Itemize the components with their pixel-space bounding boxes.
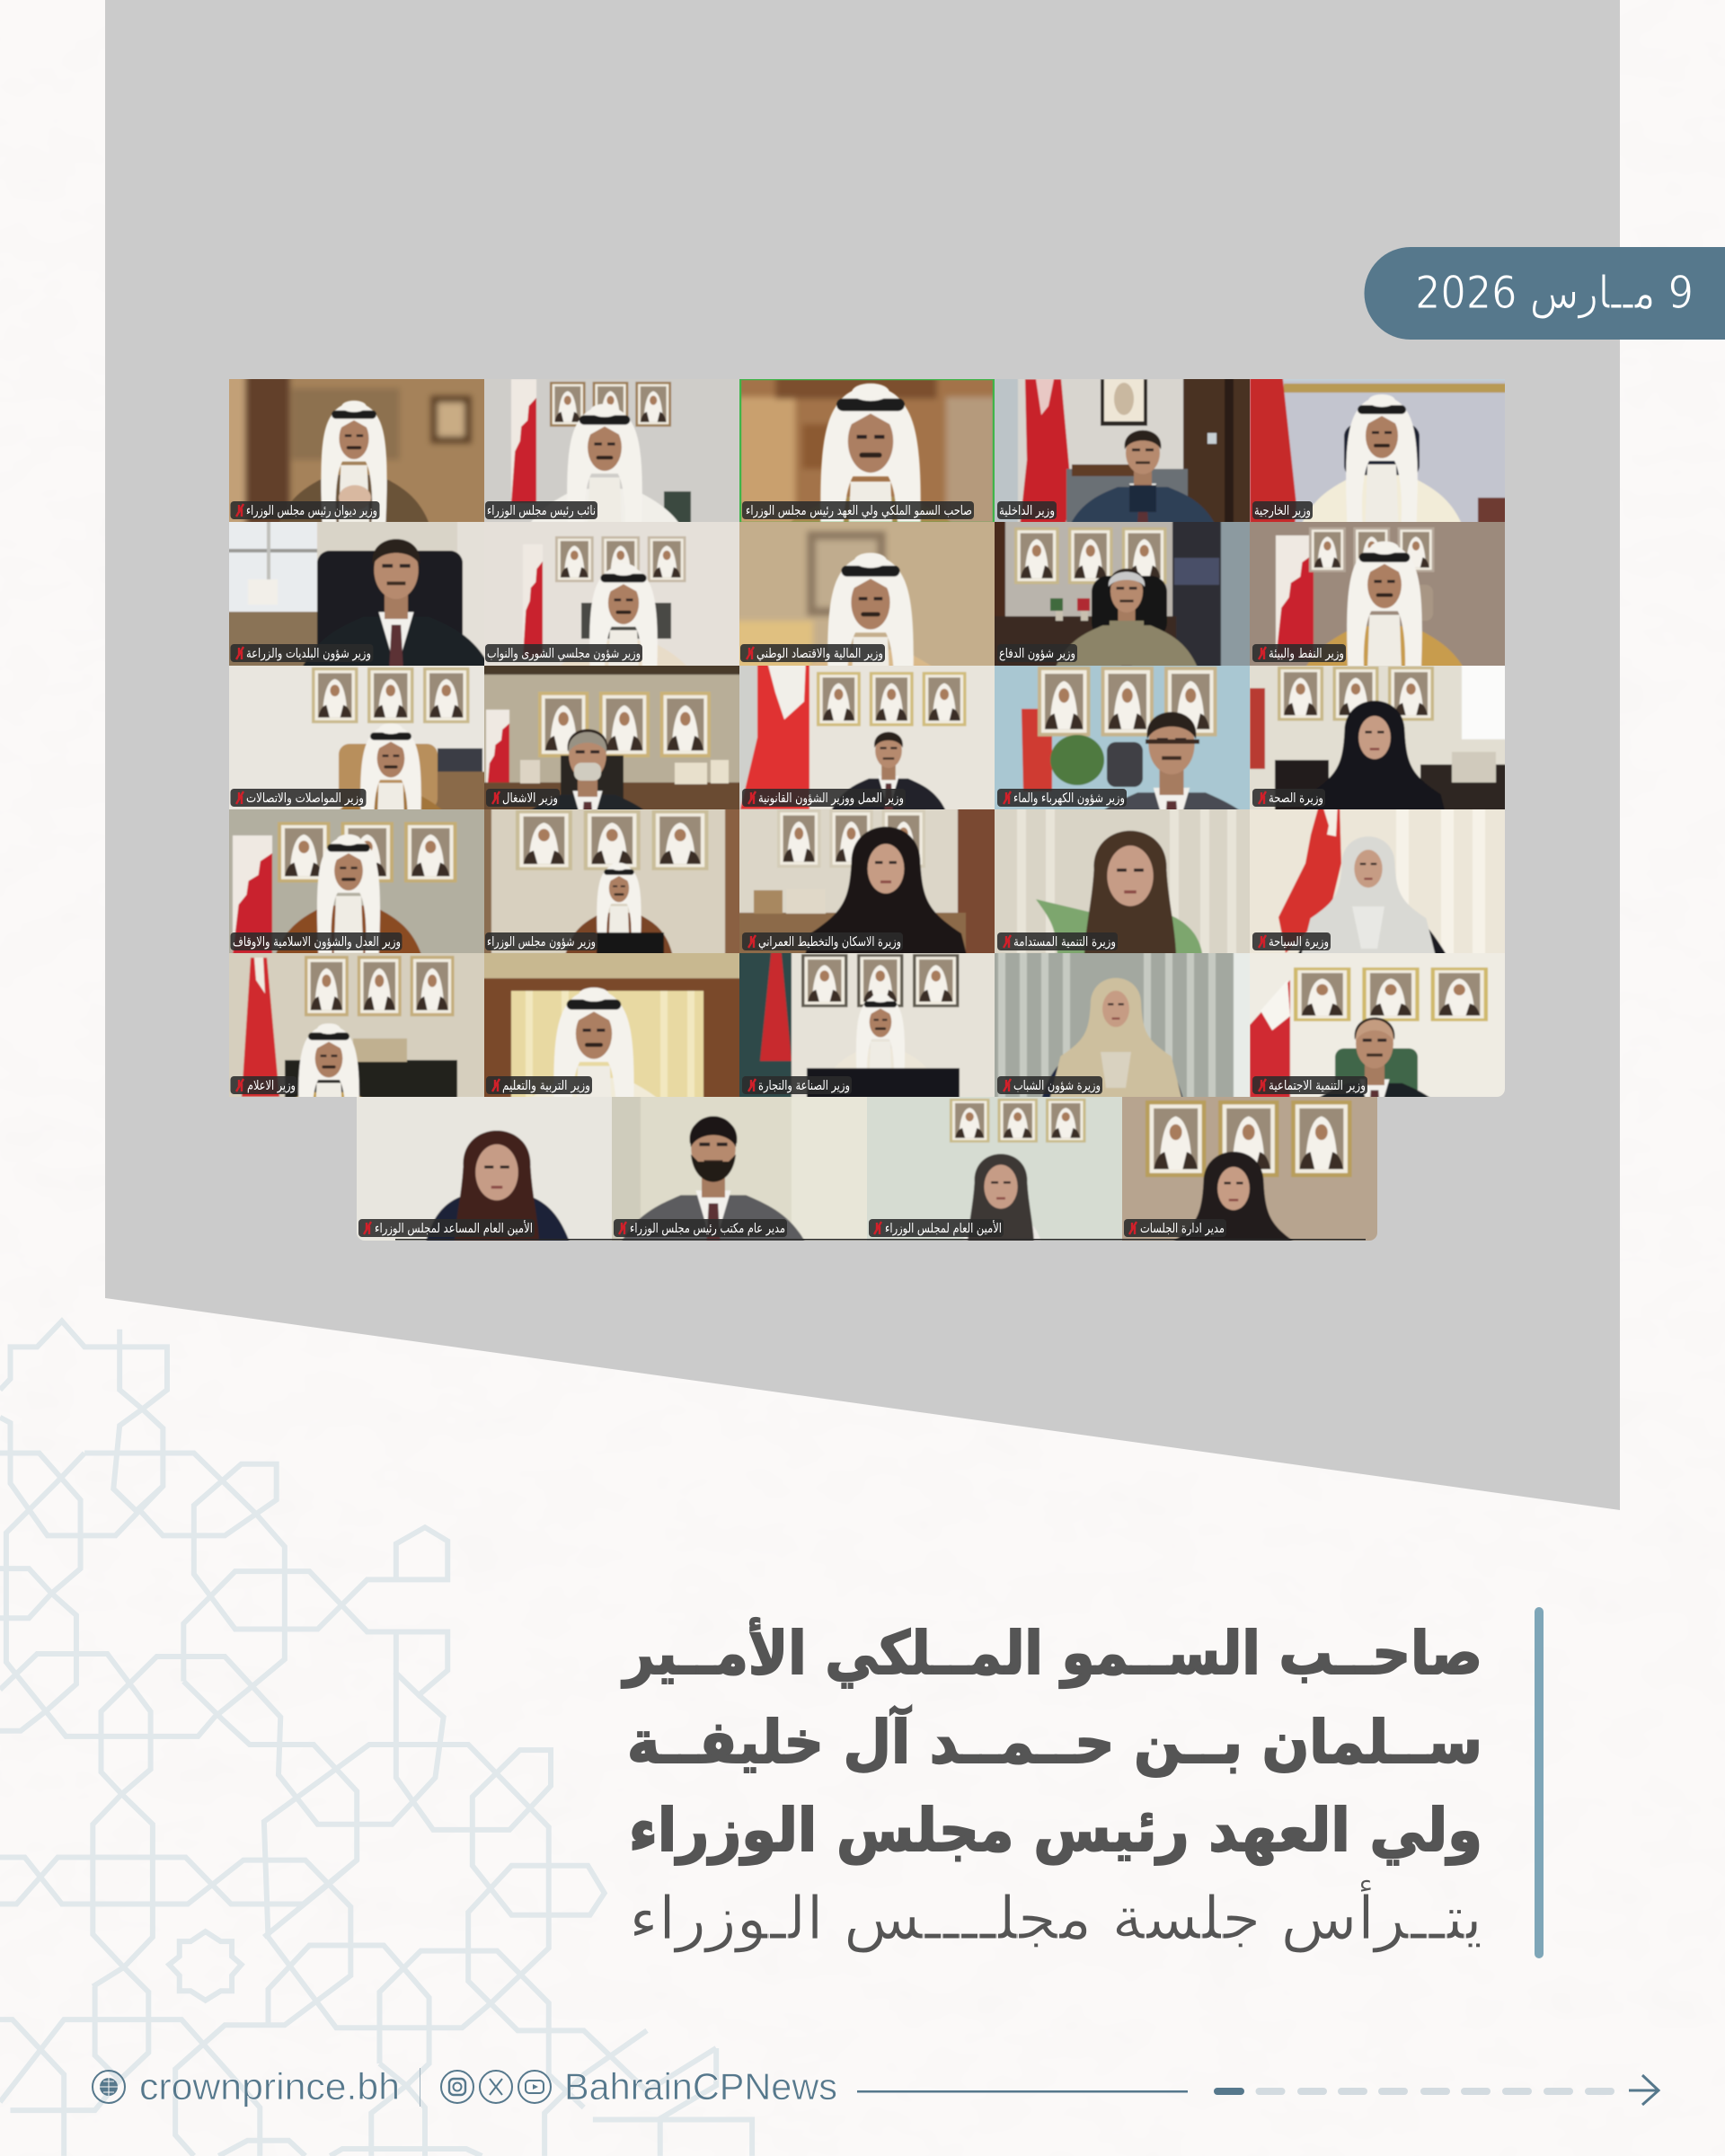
icon: youtube: [518, 2071, 551, 2103]
name label: وزير العدل والشؤون الاسلامية والاوقاف: [233, 935, 401, 950]
tile: director general of PM office: [612, 1097, 867, 1241]
name label: الأمين العام لمجلس الوزراء: [885, 1220, 1002, 1236]
footer rule: [857, 2090, 1188, 2093]
name label: [358, 1219, 535, 1237]
tile: assistant secretary general: [357, 1097, 612, 1241]
name label: [740, 644, 885, 662]
tile: justice minister: [229, 809, 484, 953]
grey photo panel: [105, 0, 1620, 1510]
tile: works minister: [484, 666, 739, 809]
accent bar: [1535, 1607, 1544, 1958]
name label: وزير الخارجية: [1254, 504, 1311, 518]
headline text: صاحــب الســمو المــلكي الأمــير: [621, 1617, 1482, 1689]
tile: secretary general: [860, 1090, 1129, 1266]
tile: municipalities minister: [229, 522, 484, 666]
name label: وزير ديوان رئيس مجلس الوزراء: [246, 504, 377, 518]
name label: [742, 789, 906, 807]
name label: نائب رئيس مجلس الوزراء: [487, 504, 596, 518]
footer website: crownprince.bh: [139, 2065, 400, 2107]
name label: [869, 1219, 1004, 1237]
name label: وزير الداخلية: [999, 504, 1055, 518]
name label: [997, 644, 1077, 662]
name label: [230, 932, 402, 950]
name label: [1252, 501, 1313, 519]
name label: [230, 644, 374, 662]
tile: youth minister: [995, 953, 1250, 1097]
tile: electricity and water minister: [995, 666, 1250, 809]
grid bottom edge line: [395, 1239, 1366, 1240]
name label: وزير المواصلات والاتصالات: [246, 791, 364, 806]
name label: وزير العمل ووزير الشؤون القانونية: [758, 791, 904, 806]
name label: وزير الاشغال: [502, 791, 558, 806]
icon: instagram: [441, 2071, 473, 2103]
tile: finance minister: [739, 522, 995, 666]
headline text: ولي العهد رئيس مجلس الوزراء: [629, 1796, 1482, 1866]
name label: وزيرة السياحة: [1269, 935, 1329, 950]
name label: وزيرة التنمية المستدامة: [1013, 935, 1116, 950]
tile: director of sessions: [1115, 1090, 1384, 1321]
tile: social development minister: [1250, 953, 1505, 1097]
icon: X: [480, 2071, 512, 2103]
tile: shura and parliament affairs minister: [484, 522, 739, 666]
tile: tourism minister: [1250, 809, 1505, 953]
name label: [614, 1219, 787, 1237]
tile: cabinet affairs minister: [484, 809, 739, 953]
video conference grid: [222, 372, 1516, 1321]
name label: الأمين العام المساعد لمجلس الوزراء: [375, 1220, 533, 1236]
social icons and handle: BahrainCPNews: [564, 2065, 837, 2107]
name label: [997, 789, 1127, 807]
tile: transport minister: [229, 666, 484, 809]
grid rounded corners: [357, 1089, 1505, 1241]
name label: [485, 644, 642, 662]
active speaker border: [740, 379, 994, 523]
name label: [1252, 644, 1346, 662]
tile: deputy prime minister: [485, 379, 692, 522]
tile: health minister: [1250, 666, 1505, 809]
name label: وزير شؤون البلديات والزراعة: [246, 647, 371, 661]
headline text: [621, 1617, 1482, 1953]
name label: [1252, 1076, 1367, 1094]
name label: وزير شؤون مجلسي الشورى والنواب: [487, 647, 641, 661]
name label: وزير شؤون مجلس الوزراء: [487, 935, 596, 950]
name label: [1252, 932, 1331, 950]
name label: [742, 1076, 852, 1094]
name label: [230, 1076, 296, 1094]
name label: [486, 789, 560, 807]
tile: industry and commerce minister: [739, 953, 995, 1097]
name label: وزيرة الصحة: [1269, 791, 1323, 806]
name label: وزيرة الاسكان والتخطيط العمراني: [758, 935, 901, 950]
name label: [485, 501, 597, 519]
name label: [1124, 1219, 1226, 1237]
date pill: [1364, 247, 1725, 340]
tile: oil and environment minister: [1250, 522, 1505, 666]
geometric arabesque pattern: [0, 1321, 752, 2156]
name label: [997, 1076, 1102, 1094]
name label: مدير ادارة الجلسات: [1140, 1222, 1225, 1236]
name label: [485, 932, 597, 950]
tile: foreign minister: [1250, 379, 1505, 522]
name label: وزير شؤون الدفاع: [999, 647, 1075, 661]
name label: وزير شؤون الكهرباء والماء: [1013, 791, 1125, 806]
tile: labour and legal affairs minister: [740, 666, 995, 809]
tile: interior minister: [995, 379, 1250, 522]
tile: information minister: [229, 953, 484, 1097]
name label: [486, 1076, 592, 1094]
icon: globe: [93, 2071, 125, 2103]
tile: crown prince: [739, 379, 995, 522]
name label: وزير الاعلام: [247, 1079, 296, 1093]
name label: وزيرة شؤون الشباب: [1013, 1079, 1101, 1093]
name label: [1252, 789, 1325, 807]
name label: [742, 932, 903, 950]
date pill: 9 مــارس 2026: [1415, 267, 1694, 319]
progress dashes: [1214, 2088, 1614, 2095]
headline text: يتــرأس جلسة مجلــــس الـوزراء: [629, 1879, 1482, 1953]
name label: [997, 932, 1118, 950]
tile: education minister: [484, 953, 739, 1097]
tile: housing minister: [739, 809, 995, 953]
name label: وزير التنمية الاجتماعية: [1269, 1079, 1366, 1093]
name label: وزير التربية والتعليم: [502, 1079, 590, 1093]
arrow: [1629, 2075, 1659, 2105]
social icons and handle: [441, 2065, 837, 2107]
name label: وزير المالية والاقتصاد الوطني: [756, 647, 883, 661]
headline text: ســلمان بــن حــمــد آل خليفــة: [627, 1705, 1482, 1777]
name label: [997, 501, 1057, 519]
name label: وزير النفط والبيئة: [1269, 647, 1344, 661]
tile: chief of PM office minister: [229, 379, 484, 522]
name label: وزير الصناعة والتجارة: [758, 1079, 850, 1093]
tile: sustainable development minister: [995, 809, 1250, 953]
name label: [230, 501, 379, 519]
name label: [230, 789, 367, 807]
name label: مدير عام مكتب رئيس مجلس الوزراء: [630, 1222, 785, 1236]
tile: defence minister: [995, 522, 1250, 666]
